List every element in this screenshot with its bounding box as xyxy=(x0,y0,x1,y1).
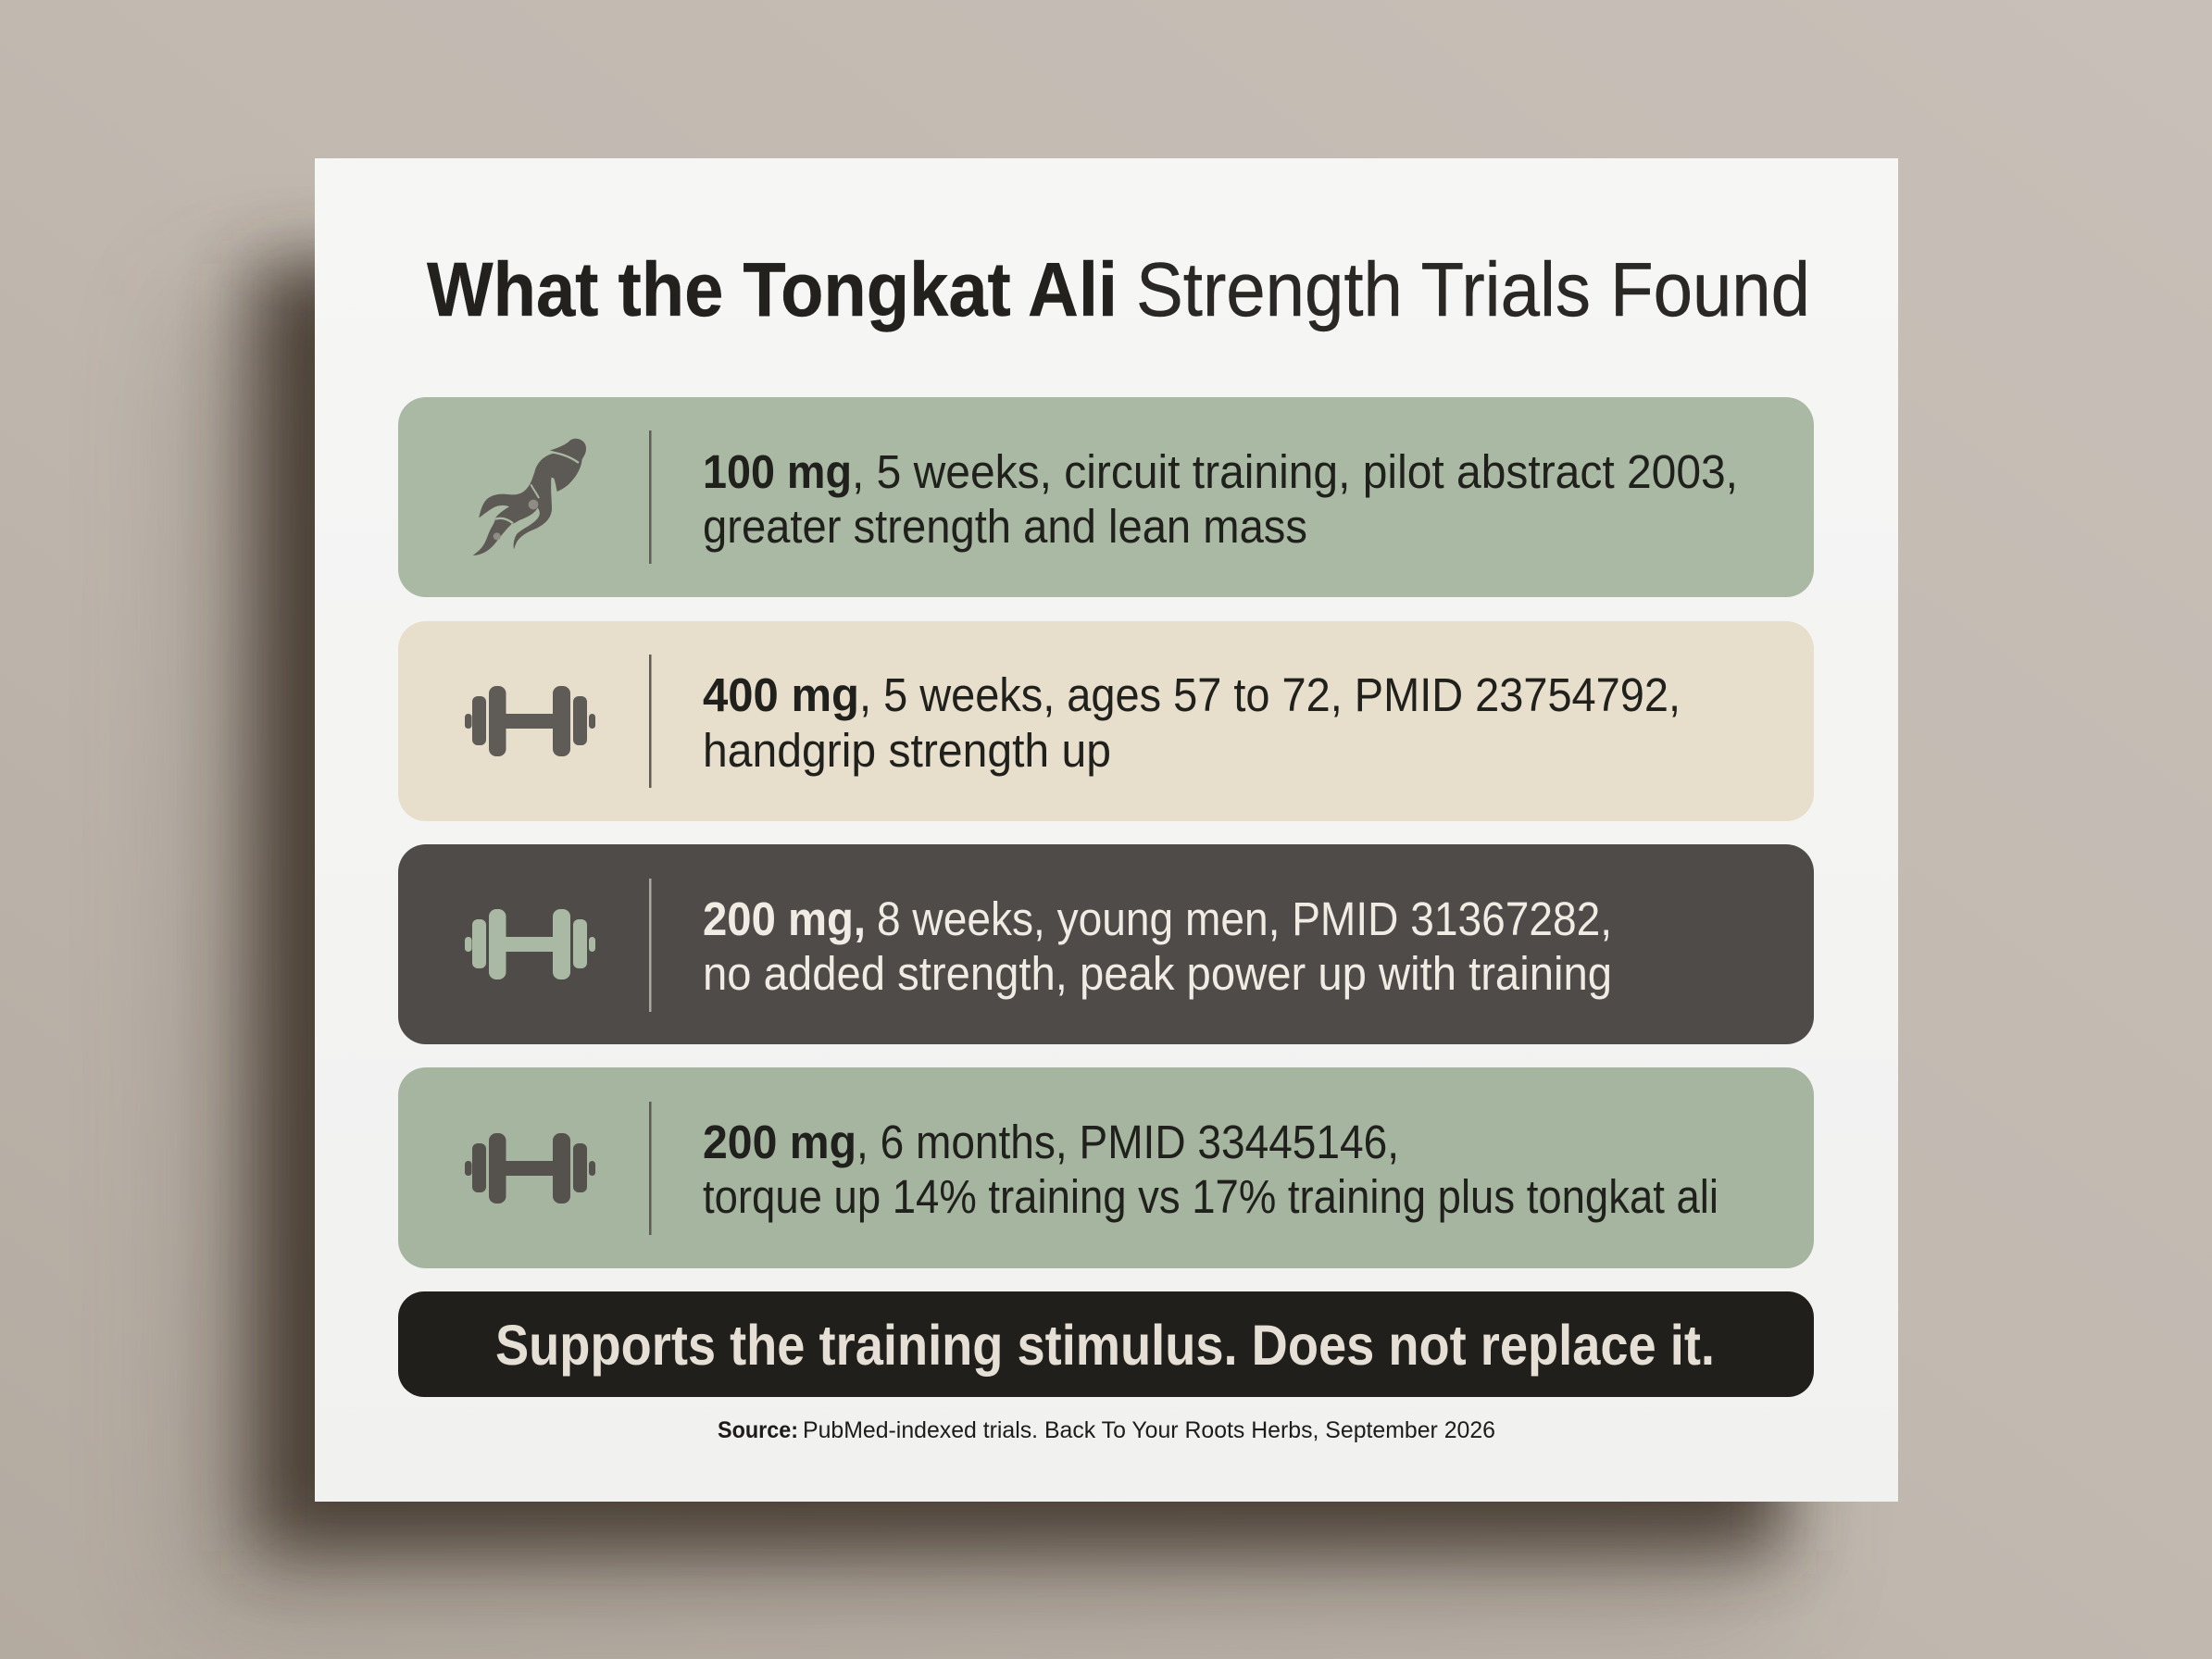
divider xyxy=(649,1102,652,1235)
trial text xyxy=(703,892,1612,1000)
trial text: no added strength, peak power up with training xyxy=(703,947,1612,1000)
conclusion banner: Supports the training stimulus. Does not replace it. xyxy=(495,1314,1715,1377)
title xyxy=(427,246,1810,332)
panel: trial 400 mg xyxy=(398,621,1814,821)
trial text xyxy=(703,668,1681,777)
panel: trial 100 mg xyxy=(398,397,1814,597)
title: What the Tongkat Ali xyxy=(427,246,1118,332)
trial text: 200 mg, xyxy=(703,892,866,945)
icon: dumbbell xyxy=(465,686,595,756)
trial text: greater strength and lean mass xyxy=(703,500,1307,553)
panel: trial 200 mg young men xyxy=(398,844,1814,1044)
trial text: 200 mg xyxy=(703,1116,856,1168)
trial text: , 5 weeks, circuit training, pilot abstract 2003, xyxy=(852,445,1738,498)
source note: Source: xyxy=(718,1417,798,1443)
divider xyxy=(649,879,652,1012)
trial text: , 5 weeks, ages 57 to 72, PMID 23754792, xyxy=(859,668,1681,721)
panel: trial 200 mg 6 months xyxy=(398,1067,1814,1268)
trial text: 100 mg xyxy=(703,445,852,498)
icon: dumbbell xyxy=(465,1133,595,1204)
icon: tongkat ali root xyxy=(473,439,586,555)
white card xyxy=(315,158,1898,1502)
trial text: 8 weeks, young men, PMID 31367282, xyxy=(877,892,1612,945)
divider xyxy=(649,430,652,564)
wide card shadow xyxy=(194,296,1768,1611)
conclusion banner xyxy=(398,1291,1814,1397)
trial text xyxy=(703,445,1738,553)
source note: PubMed-indexed trials. Back To Your Roots Herbs, September 2026 xyxy=(803,1417,1495,1443)
title: Strength Trials Found xyxy=(1136,246,1810,332)
trial text xyxy=(703,1116,1718,1223)
divider xyxy=(649,655,652,788)
trial text: handgrip strength up xyxy=(703,724,1111,777)
trial text: , 6 months, PMID 33445146, xyxy=(856,1116,1399,1168)
trial text: torque up 14% training vs 17% training plus tongkat ali xyxy=(703,1170,1718,1223)
tight card shadow xyxy=(255,264,1782,1551)
icon: dumbbell xyxy=(465,909,595,979)
trial text: 400 mg xyxy=(703,668,859,721)
